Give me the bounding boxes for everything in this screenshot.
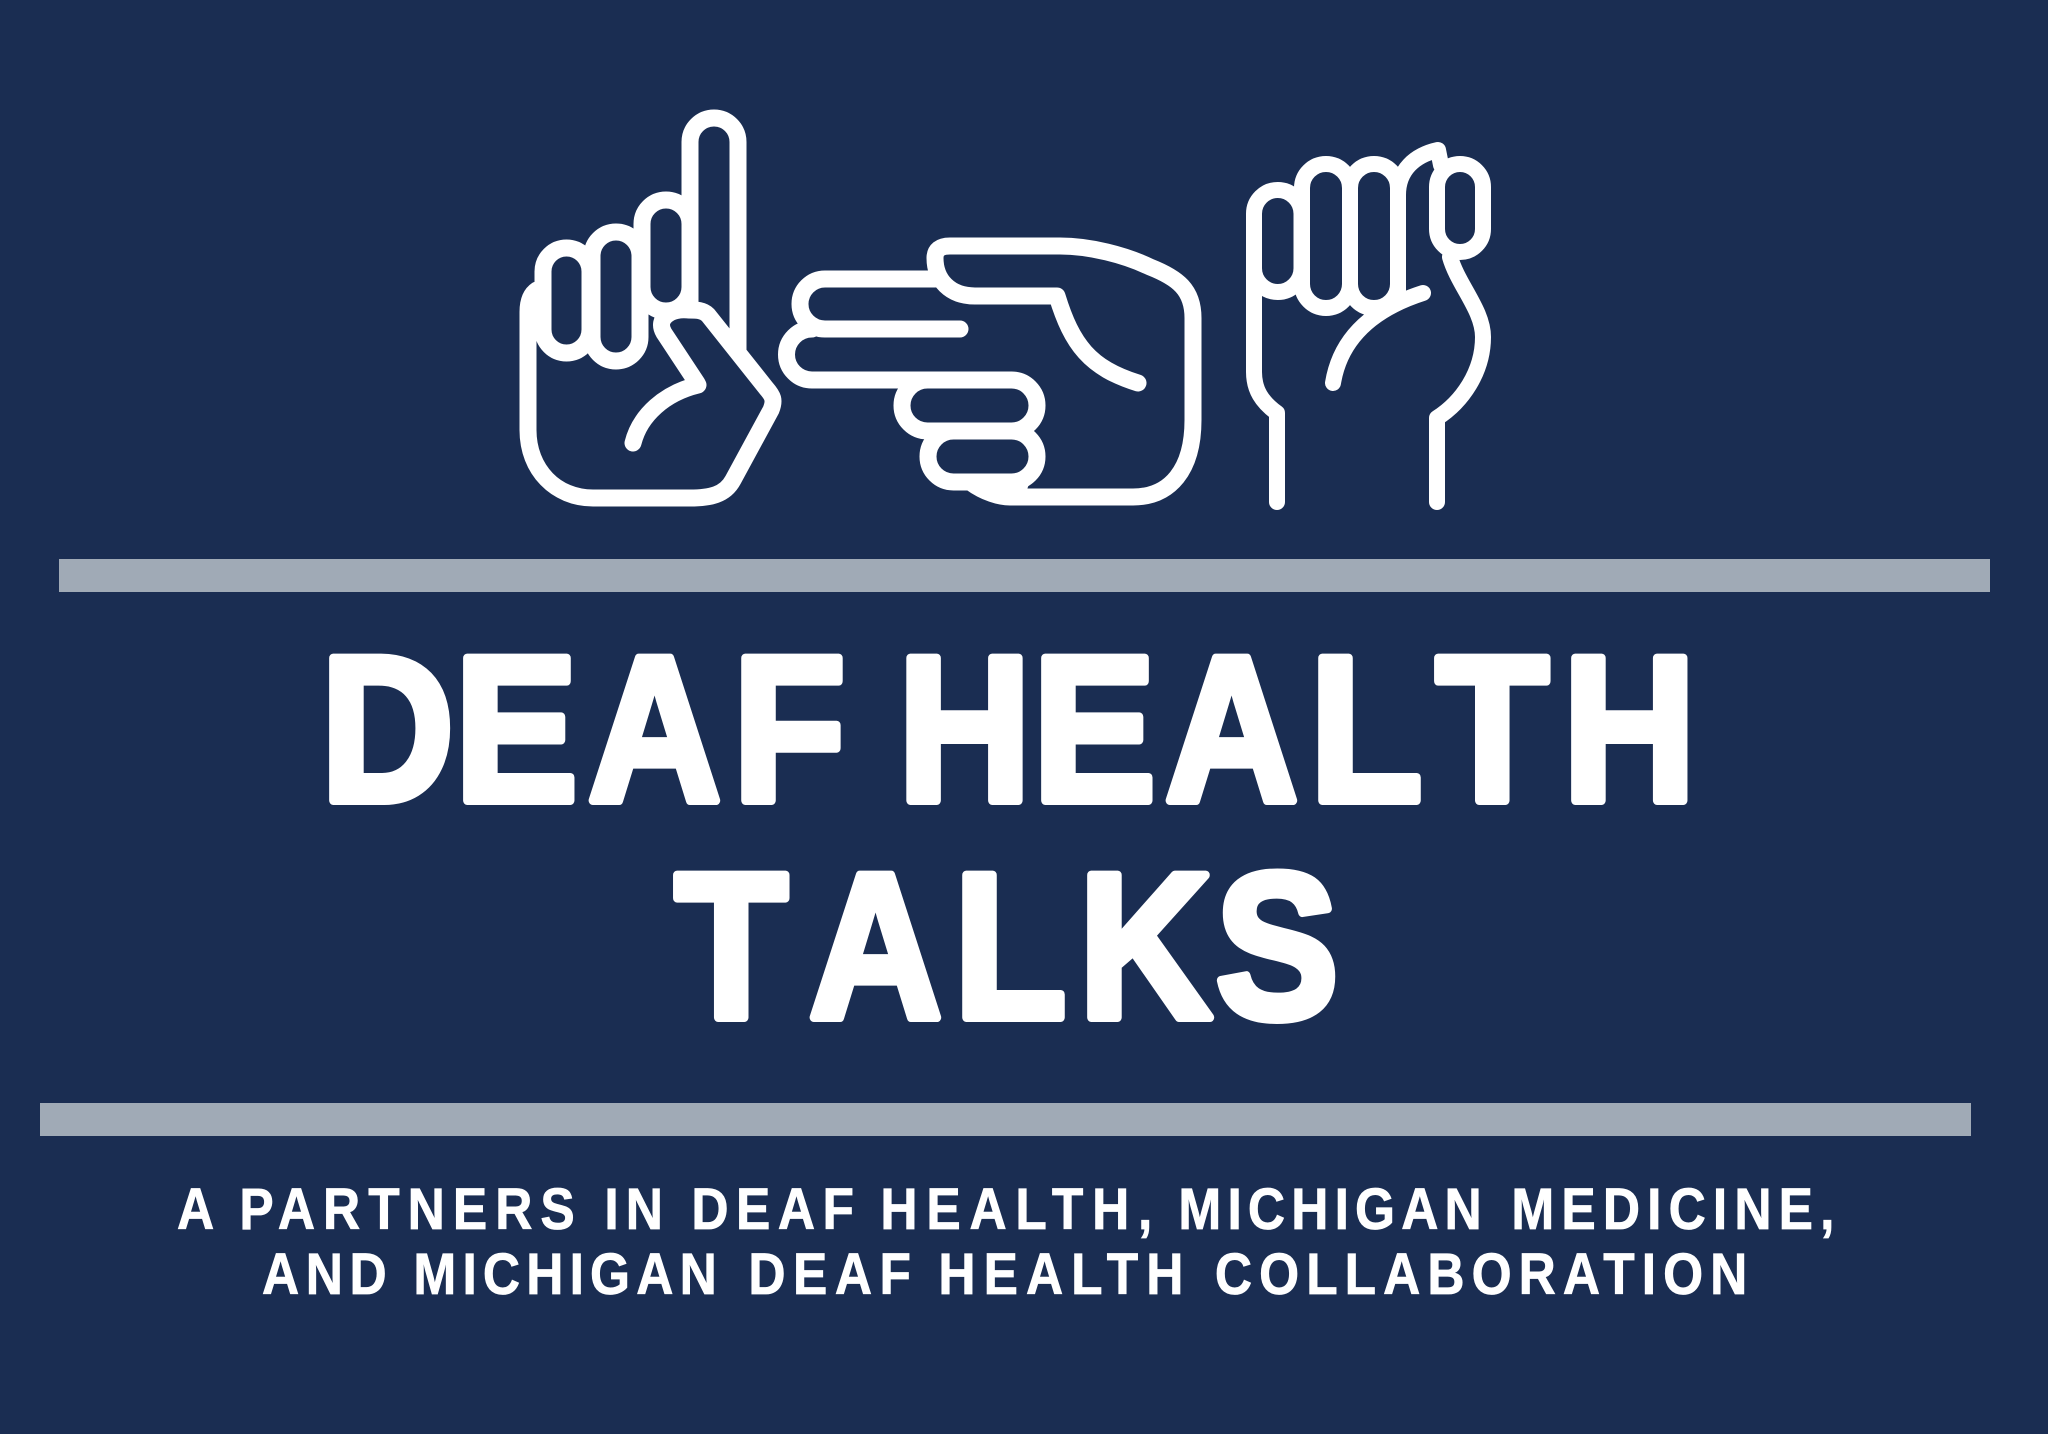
subtitle line 1: IN (604, 1176, 691, 1242)
top divider bar (59, 559, 1990, 592)
title line 2: TALKS (675, 831, 1338, 1062)
subtitle line 2: MICHIGAN (413, 1241, 743, 1307)
subtitle line 2: COLLABORATION (1215, 1241, 1754, 1307)
subtitle line 1: MICHIGAN (1178, 1176, 1508, 1242)
subtitle line 2: HEALTH (938, 1241, 1214, 1307)
title line 1: DEAF HEALTH (321, 614, 1696, 845)
subtitle line 1: DEAF (691, 1176, 883, 1242)
subtitle (177, 1176, 1842, 1307)
subtitle line 1: PARTNERS (239, 1176, 605, 1242)
bottom divider bar (40, 1103, 1971, 1136)
subtitle line 2: DEAF (748, 1241, 940, 1307)
subtitle line 1: MEDICINE, (1511, 1176, 1842, 1242)
subtitle line 2: AND (262, 1241, 414, 1307)
title (321, 614, 1696, 1062)
icon: hand signing letter H (786, 246, 1193, 497)
icon: hand signing letter D (528, 118, 773, 498)
subtitle line 1: HEALTH, (880, 1176, 1184, 1242)
icon: hand signing letter T (1254, 150, 1483, 502)
subtitle line 1: A (177, 1176, 227, 1242)
